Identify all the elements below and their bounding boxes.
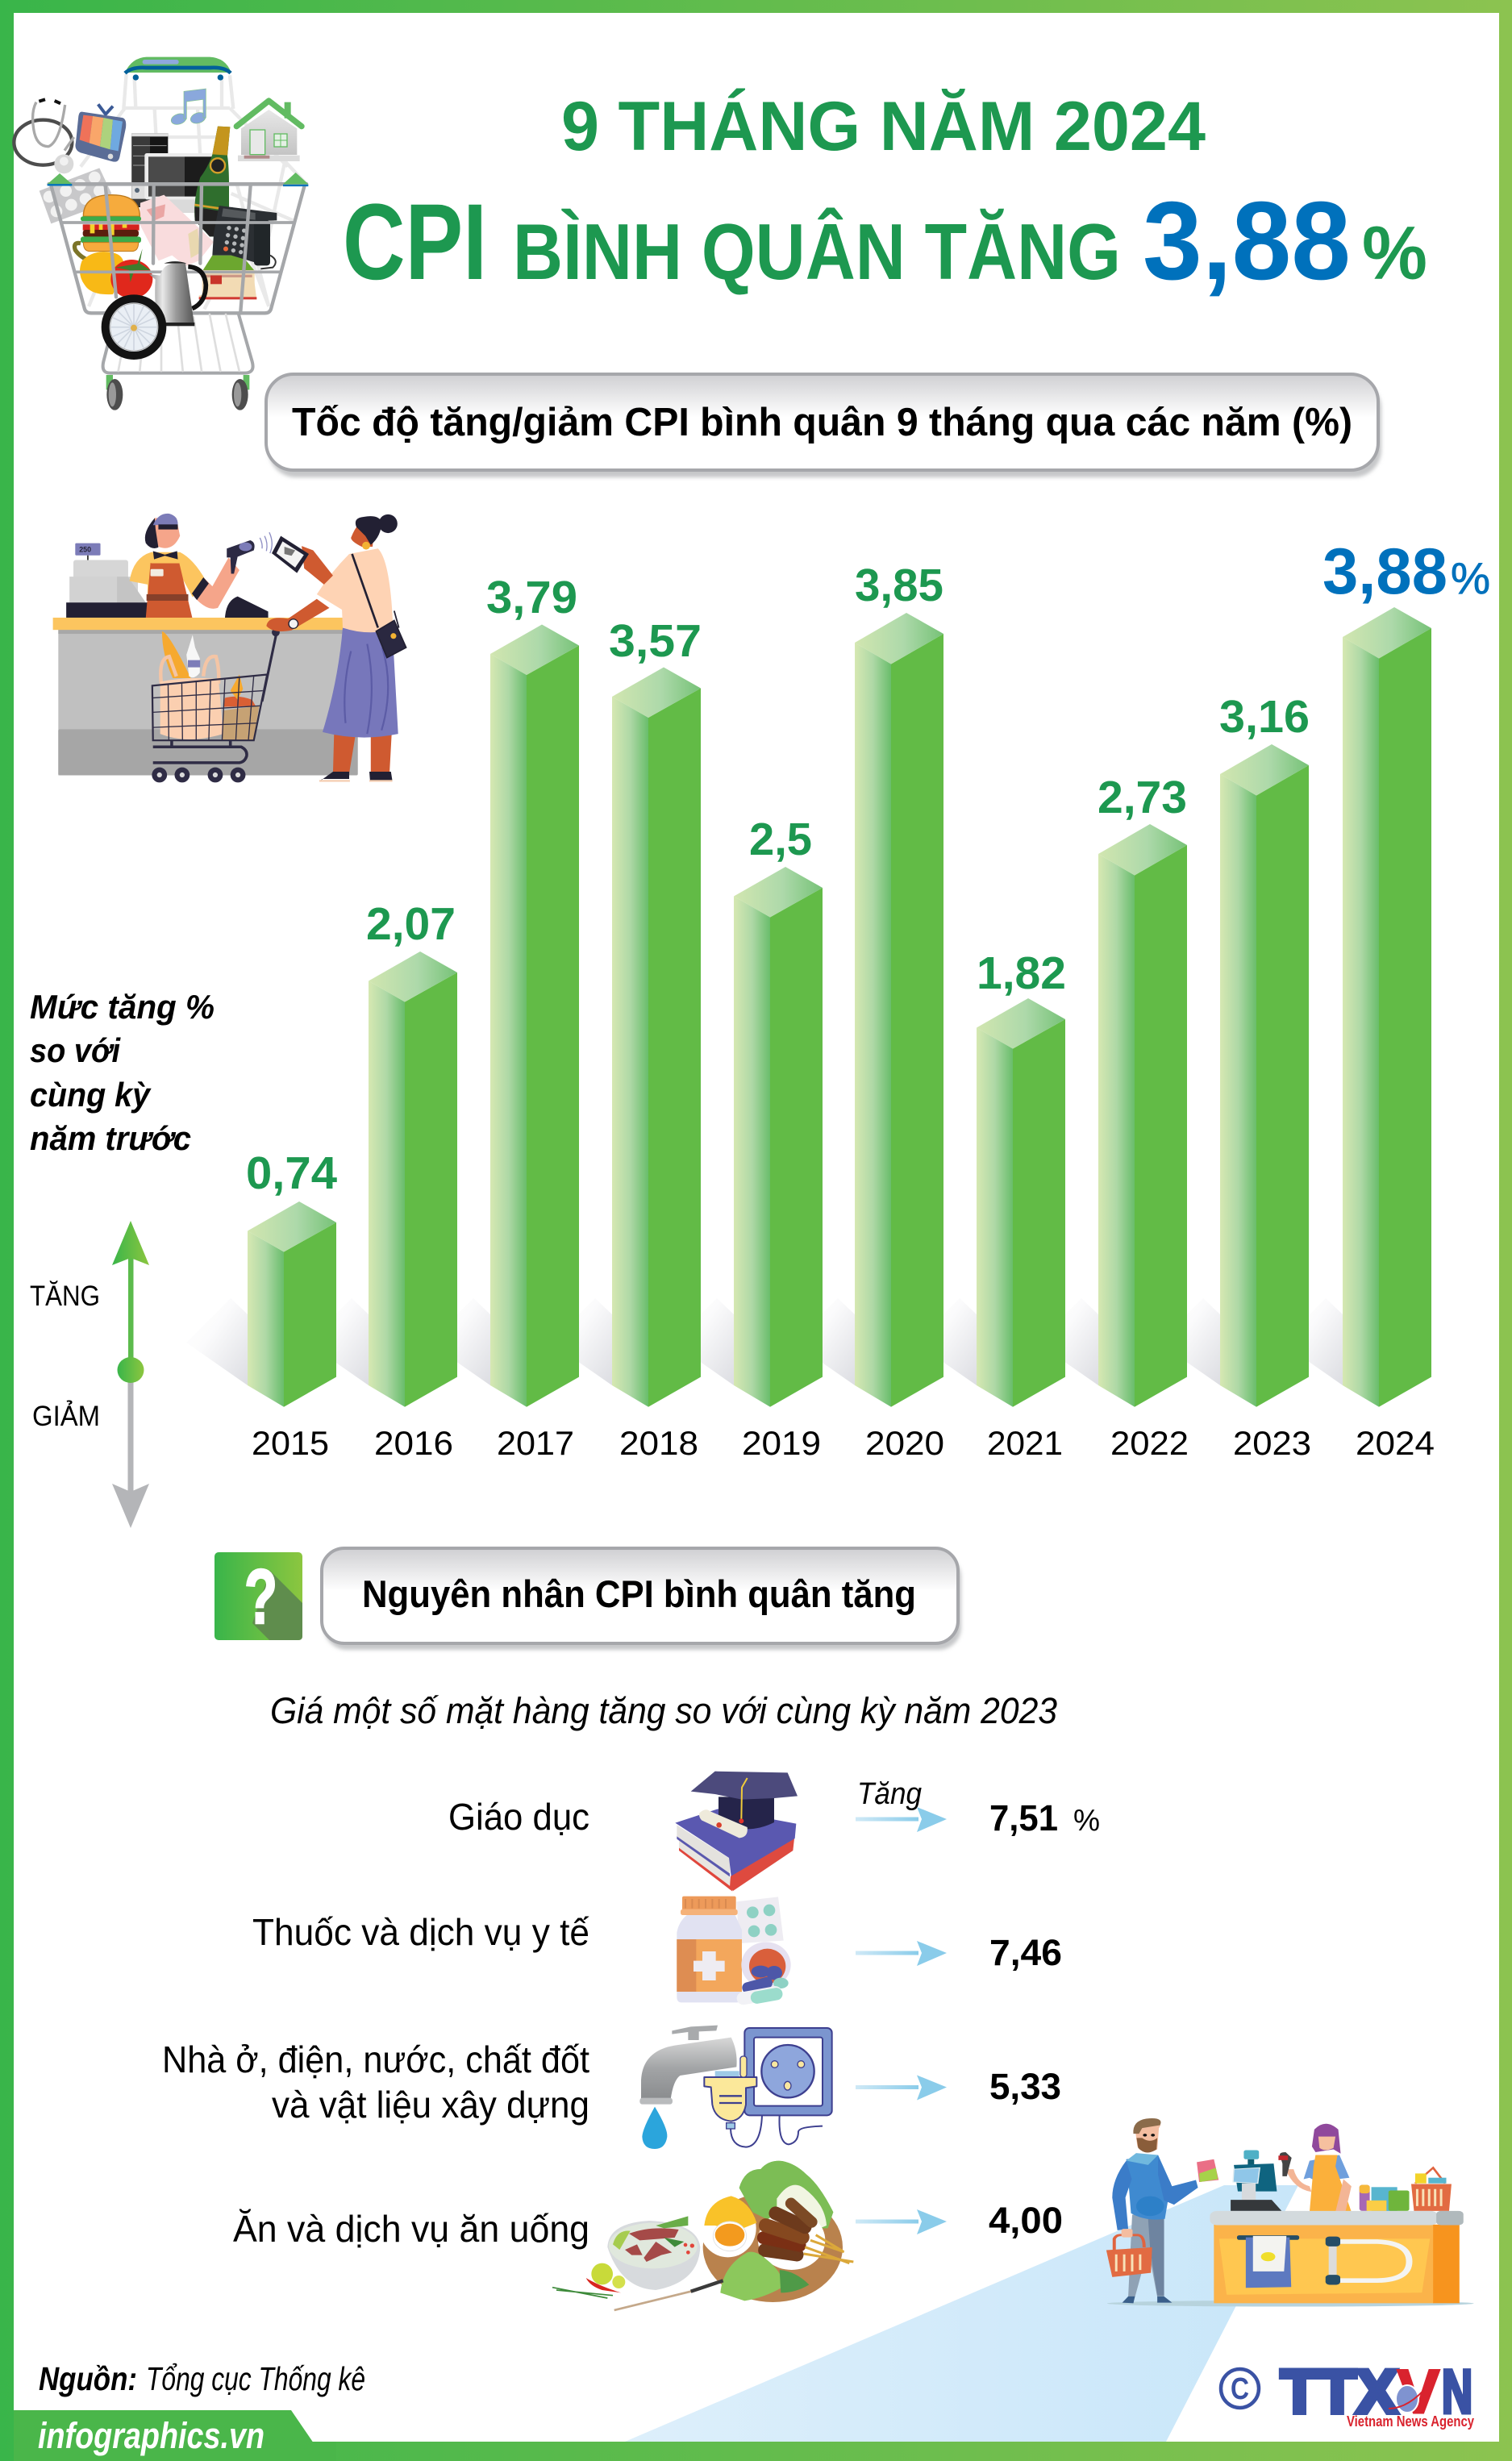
- card terminal: [225, 597, 269, 618]
- title line 2: %: [1362, 210, 1427, 295]
- row: education: Giáo dục: [448, 1796, 589, 1838]
- cash register: 250: [79, 545, 91, 553]
- logo: TTXVN copyright: N: [1442, 2358, 1472, 2426]
- row: housing and utilities: và vật liệu xây dựng: [272, 2084, 589, 2126]
- footer tab: website: infographics.vn: [38, 2415, 264, 2456]
- bar 2015: [246, 1147, 337, 1462]
- legend: heading: so với: [30, 1031, 121, 1069]
- icon: telephone and books: [199, 206, 277, 299]
- row: medicine: [252, 1897, 791, 2005]
- bar 2018: [609, 615, 702, 1462]
- bar 2016: 2,07: [366, 898, 456, 950]
- legend: heading: Mức tăng %: [30, 988, 215, 1026]
- logo: TTXVN copyright: C: [1231, 2372, 1249, 2406]
- bar 2024: 3,88: [1322, 535, 1447, 608]
- bar shadows: [186, 1298, 1343, 1385]
- label: increase: Tăng: [857, 1777, 922, 1811]
- icon: medicine bottle and pills: [677, 1897, 791, 2005]
- bar 2023: 2023: [1233, 1424, 1311, 1462]
- source: Nguồn:: [39, 2360, 137, 2397]
- icon: music note: [170, 89, 207, 127]
- bar 2023: 3,16: [1219, 691, 1310, 743]
- arrow 4: [856, 2209, 947, 2234]
- arrow 1: [856, 1807, 947, 1832]
- values: 7,46: [989, 1932, 1062, 1973]
- bar chart: [186, 535, 1490, 1462]
- illustration: checkout counter with cashier and customer: [53, 514, 406, 782]
- customer: [266, 514, 406, 782]
- icon: question mark: [215, 1552, 302, 1640]
- logo: TTXVN copyright: [1221, 2358, 1474, 2430]
- icon: books and graduation cap: [675, 1772, 798, 1892]
- icon: pill blister: [40, 168, 111, 223]
- bar 2016: 2016: [374, 1424, 453, 1462]
- bar 2017: 2017: [497, 1424, 574, 1462]
- bar 2018: 3,57: [609, 615, 702, 667]
- bar 2020: [855, 560, 944, 1462]
- front rails: [49, 184, 306, 373]
- icon: shopping cart full of goods: [14, 57, 308, 410]
- bar 2020: 3,85: [855, 560, 943, 611]
- bar 2019: 2,5: [749, 814, 812, 865]
- title line 2: 3,88: [1143, 179, 1351, 303]
- title line 2: BÌNH QUÂN TĂNG: [513, 207, 1121, 296]
- heading box: causes: [322, 1548, 961, 1650]
- bar 2021: 1,82: [977, 947, 1066, 999]
- illustration: shop counter with customer and cashier: [1106, 2118, 1474, 2307]
- source: Tổng cục Thống kê: [146, 2360, 365, 2397]
- bar 2017: [486, 572, 579, 1462]
- counter: [58, 627, 358, 775]
- source: [39, 2360, 365, 2397]
- bar 2024: %: [1451, 553, 1490, 603]
- row: housing and utilities: Nhà ở, điện, nước, chất đốt: [162, 2038, 589, 2080]
- bar 2022: [1098, 772, 1189, 1462]
- bar 2023: [1219, 691, 1311, 1462]
- icon: kettle: [149, 261, 206, 326]
- products: [1360, 2167, 1452, 2211]
- bar 2022: 2022: [1110, 1424, 1189, 1462]
- subheading: Giá một số mặt hàng tăng so với cùng kỳ năm 2023: [270, 1690, 1057, 1731]
- bar 2015: 0,74: [246, 1147, 337, 1199]
- customer: [1106, 2118, 1218, 2303]
- icon: pepper and tomato: [74, 243, 152, 298]
- cashier: [130, 514, 240, 618]
- values: 5,33: [989, 2066, 1061, 2107]
- blue light beam: [625, 2185, 1298, 2442]
- legend: up and down arrows: [30, 1221, 149, 1528]
- values: %: [1073, 1804, 1100, 1838]
- row: medicine: Thuốc và dịch vụ y tế: [252, 1911, 589, 1953]
- values: [989, 1797, 1100, 2241]
- bar 2024: [1322, 535, 1490, 1462]
- legend: up and down arrows: GIẢM: [32, 1400, 100, 1432]
- icon: computer: [131, 133, 215, 213]
- row: education: [448, 1772, 798, 1892]
- row: food: Ăn và dịch vụ ăn uống: [233, 2208, 589, 2250]
- icon: stethoscope: [14, 99, 74, 173]
- heading box: chart title: Tốc độ tăng/giảm CPI bình quân 9 tháng qua các năm (%): [292, 401, 1352, 444]
- arrows to values: [856, 1777, 947, 2234]
- bar 2024: 2024: [1356, 1424, 1435, 1462]
- icon: burger: [81, 195, 141, 252]
- icon: car tyre: [106, 298, 162, 356]
- bar 2020: 2020: [865, 1424, 944, 1462]
- arrow 3: [856, 2076, 947, 2100]
- bar 2021: 2021: [987, 1424, 1063, 1462]
- icon: shirt: [140, 195, 214, 266]
- bar 2019: [734, 814, 823, 1462]
- values: 4,00: [989, 2200, 1063, 2241]
- bar 2017: 3,79: [486, 572, 577, 623]
- cart handle: [125, 57, 231, 81]
- cash register: [66, 543, 148, 618]
- bar 2021: [977, 947, 1066, 1462]
- shopping cart with bags: [152, 628, 280, 782]
- title line 1: 9 THÁNG NĂM 2024: [561, 88, 1206, 165]
- legend: heading: [30, 988, 215, 1157]
- footer tab: website: [14, 2410, 336, 2461]
- heading box: causes: Nguyên nhân CPI bình quân tăng: [362, 1572, 916, 1615]
- bar 2019: 2019: [742, 1424, 821, 1462]
- title line 2: [343, 179, 1427, 303]
- heading box: chart title: [266, 374, 1381, 477]
- counter: [1210, 2211, 1464, 2303]
- cashier: [1278, 2124, 1352, 2212]
- logo: TTXVN copyright: V: [1397, 2358, 1439, 2426]
- row: food: [233, 2161, 853, 2310]
- barcode scanner: [227, 532, 272, 574]
- icon: house: [236, 101, 302, 161]
- arrow 2: [856, 1941, 947, 1966]
- icon: question mark: ?: [244, 1554, 277, 1640]
- icon: television: [75, 104, 126, 162]
- bar 2018: 2018: [619, 1424, 698, 1462]
- logo: TTXVN copyright: Vietnam News Agency: [1347, 2413, 1474, 2430]
- bar 2022: 2,73: [1098, 772, 1187, 823]
- legend: up and down arrows: TĂNG: [30, 1280, 100, 1312]
- values: 7,51: [989, 1797, 1058, 1838]
- icon: champagne bottle: [194, 127, 230, 236]
- legend: heading: cùng kỳ: [30, 1076, 152, 1114]
- icon: vietnamese food plate: [552, 2161, 853, 2310]
- bar 2016: [366, 898, 457, 1462]
- counter top: [53, 618, 343, 630]
- cart wheels: [106, 375, 249, 410]
- row: housing and utilities: [162, 2026, 832, 2149]
- cart corners: [48, 173, 308, 185]
- legend: heading: năm trước: [30, 1119, 191, 1157]
- bar 2015: 2015: [252, 1424, 329, 1462]
- logo: TTXVN copyright: TTX: [1281, 2358, 1397, 2426]
- register: [1231, 2151, 1281, 2211]
- icon: water tap and power socket: [639, 2026, 832, 2149]
- title line 2: CPI: [343, 182, 487, 302]
